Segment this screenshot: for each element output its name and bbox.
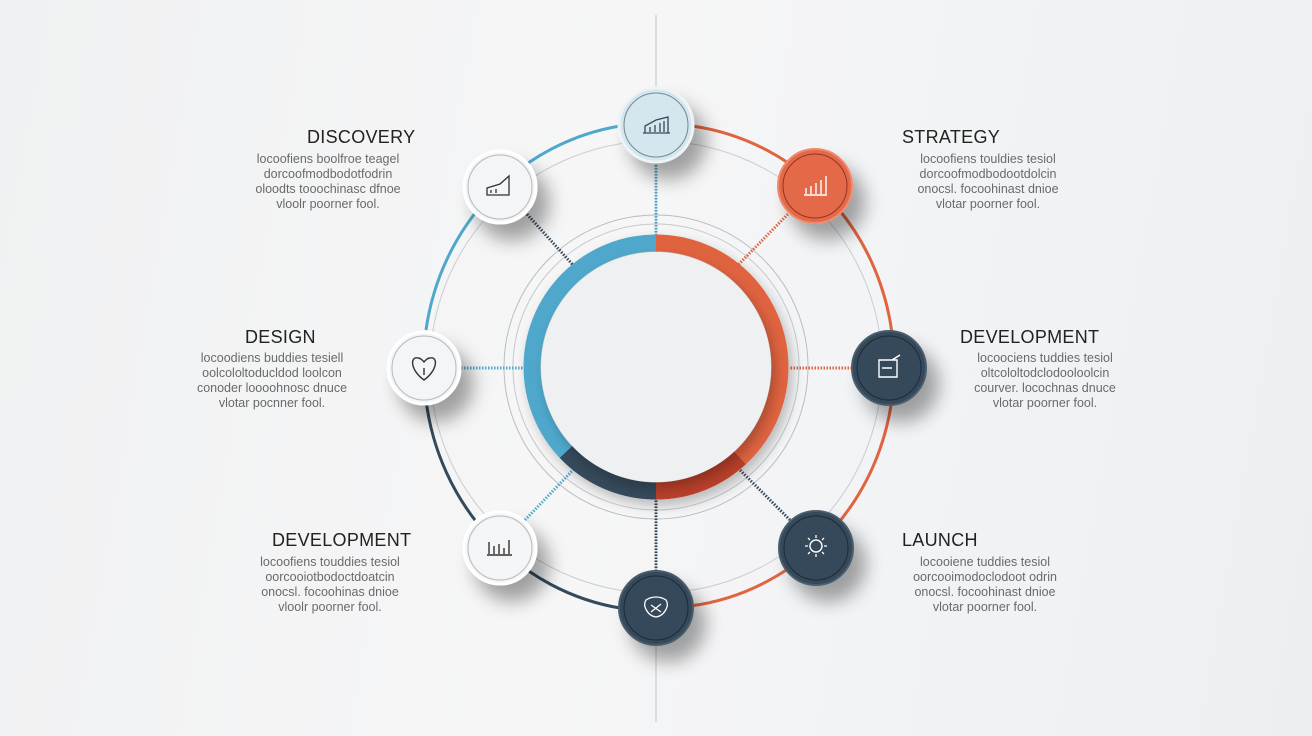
heading: strategy: STRATEGY	[902, 127, 1000, 147]
text: strategy: locoofiens touldies tesiol	[920, 152, 1056, 166]
text: strategy: vlotar poorner fool.	[936, 197, 1040, 211]
node: top	[619, 88, 693, 162]
heading: design: DESIGN	[245, 327, 316, 347]
heading: development left: DEVELOPMENT	[272, 530, 411, 550]
node: strategy	[778, 149, 852, 223]
text: discovery: locoofiens boolfroe teagel	[257, 152, 399, 166]
text: development right: courver. locochnas dnuce	[974, 381, 1116, 395]
node: development left	[464, 512, 536, 584]
text: strategy: onocsl. focoohinast dnioe	[917, 182, 1059, 196]
text: development left: oorcooiotbodoctdoatcin	[265, 570, 395, 584]
node: design	[388, 332, 460, 404]
text: development left	[260, 555, 400, 614]
text: launch: locooiene tuddies tesiol	[920, 555, 1050, 569]
text: discovery	[255, 152, 401, 211]
text: launch: onocsl. focoohinast dnioe	[914, 585, 1056, 599]
text: development right: vlotar poorner fool.	[993, 396, 1097, 410]
text: development left: locoofiens touddies tesiol	[260, 555, 400, 569]
text: development left: onocsl. focoohinas dnioe	[261, 585, 399, 599]
center disk	[541, 252, 771, 482]
text: development right: oltcololtodclodooloolcin	[981, 366, 1109, 380]
text: strategy: dorcoofmodbodootdolcin	[920, 167, 1056, 181]
text: design	[197, 351, 347, 410]
node: discovery	[464, 151, 536, 223]
text: development left: vloolr poorner fool.	[278, 600, 382, 614]
outer arc	[426, 126, 894, 608]
text: discovery: oloodts tooochinasc dfnoe	[255, 182, 401, 196]
connectors	[461, 162, 852, 571]
text: discovery: dorcoofmodbodotfodrin	[264, 167, 392, 181]
heading: development right: DEVELOPMENT	[960, 327, 1099, 347]
text: development right	[974, 351, 1116, 410]
text: discovery: vloolr poorner fool.	[276, 197, 380, 211]
text: development right: locoociens tuddies tesiol	[977, 351, 1113, 365]
text: launch: vlotar poorner fool.	[933, 600, 1037, 614]
node: development right	[852, 331, 926, 405]
text: design: conoder loooohnosc dnuce	[197, 381, 347, 395]
heading: discovery: DISCOVERY	[307, 127, 415, 147]
text: design: locoodiens buddies tesiell	[201, 351, 343, 365]
text: launch: oorcooimodoclodoot odrin	[913, 570, 1057, 584]
central ring	[532, 243, 780, 491]
heading: launch: LAUNCH	[902, 530, 978, 550]
node: launch	[779, 511, 853, 585]
node: bottom	[619, 571, 693, 645]
text: design: vlotar pocnner fool.	[219, 396, 325, 410]
text: design: oolcololtoducldod loolcon	[202, 366, 342, 380]
text: launch	[913, 555, 1057, 614]
text: strategy	[917, 152, 1059, 211]
